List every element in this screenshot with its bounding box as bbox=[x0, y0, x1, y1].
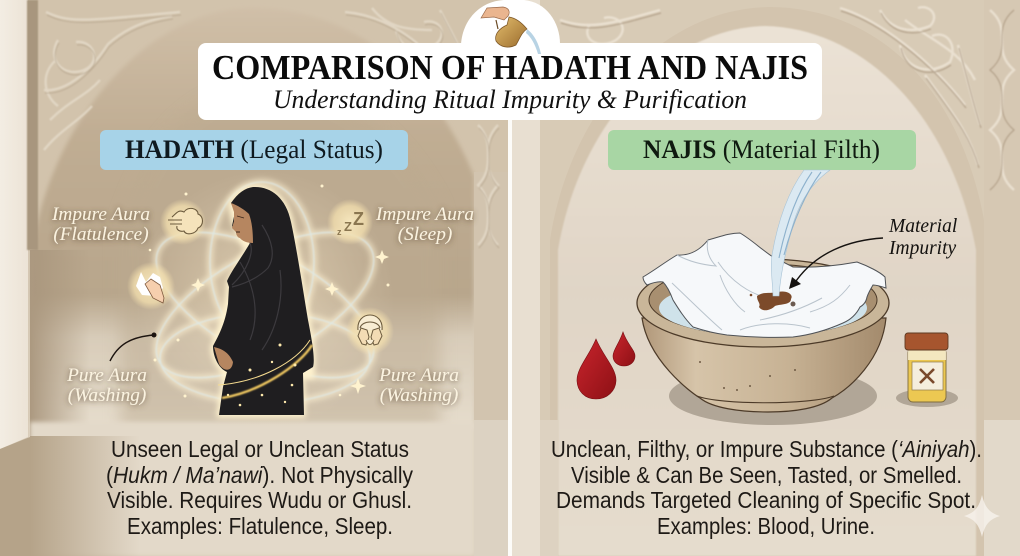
stain bbox=[757, 291, 792, 310]
text block: Najis description bbox=[551, 436, 982, 539]
icon: washing face bbox=[346, 307, 394, 355]
arch ornament: left bbox=[44, 8, 498, 245]
badge: white semicircle behind jug bbox=[461, 0, 560, 44]
label: impure aura flatulence bbox=[51, 204, 150, 245]
text block: Hadath description: Unseen Legal or Unclean Status bbox=[111, 436, 409, 462]
arch ornament: right bbox=[560, 7, 1014, 190]
text block: Hadath description: Visible. Requires Wudu or Ghusl. bbox=[107, 487, 412, 513]
bowl specks bbox=[699, 361, 796, 391]
label: pure aura washing right: (Washing) bbox=[380, 385, 458, 406]
divider bbox=[508, 0, 512, 556]
label: impure aura sleep bbox=[375, 204, 474, 245]
icon: sleep zzz: Z bbox=[344, 219, 352, 234]
label: impure aura sleep: (Sleep) bbox=[398, 224, 452, 245]
label: pure aura washing right: Pure Aura bbox=[378, 365, 459, 386]
icon: sleep zzz: Z bbox=[353, 209, 364, 229]
icon: pouring jug bbox=[481, 7, 541, 54]
sparkles bbox=[149, 184, 390, 398]
arrow bbox=[794, 238, 883, 284]
text block: Hadath description: Examples: Flatulence, Sleep. bbox=[127, 513, 393, 539]
bowl shadow bbox=[669, 367, 877, 425]
subtitle: Understanding Ritual Impurity & Purification bbox=[273, 85, 747, 114]
heading: Hadath: HADATH (Legal Status) bbox=[125, 135, 383, 164]
figure bbox=[212, 186, 314, 416]
title panel bbox=[198, 43, 822, 120]
heading: Najis bbox=[608, 130, 916, 170]
sparkle band bbox=[222, 345, 312, 398]
heading: Hadath bbox=[100, 130, 408, 170]
bowl body bbox=[642, 318, 886, 412]
label: pure aura washing left: (Washing) bbox=[68, 385, 146, 406]
panel: left arch background bbox=[0, 0, 510, 556]
face bbox=[231, 203, 253, 243]
illustration: woman with aura rings bbox=[135, 170, 395, 430]
label: pure aura washing left bbox=[66, 332, 156, 406]
label: material impurity bbox=[789, 216, 957, 289]
water stream bbox=[771, 170, 830, 296]
text block: Hadath description bbox=[106, 436, 413, 539]
icon: corner sparkle bbox=[964, 495, 1000, 537]
illustration: bowl with stained cloth bbox=[637, 170, 889, 425]
icon: flatulence cloud bbox=[160, 199, 206, 245]
label: pure aura washing left: Pure Aura bbox=[66, 365, 147, 386]
title: COMPARISON OF HADATH AND NAJIS bbox=[212, 48, 808, 87]
icon: sleep zzz: z bbox=[337, 227, 342, 237]
text block: Najis description: Visible & Can Be Seen, Tasted, or Smelled. bbox=[571, 462, 962, 488]
label: impure aura flatulence: Impure Aura bbox=[51, 204, 150, 225]
icon: blood drops bbox=[577, 332, 635, 399]
text block: Najis description: Demands Targeted Cleaning of Specific Spot. bbox=[556, 487, 976, 513]
bowl rim bbox=[637, 259, 889, 347]
icon: sleep zzz bbox=[327, 199, 373, 245]
text block: Hadath description: (Hukm / Ma’nawi). Not Physically bbox=[106, 462, 413, 488]
text block: Najis description: Examples: Blood, Urine. bbox=[657, 513, 875, 539]
label: material impurity: Impurity bbox=[888, 238, 956, 259]
cloth bbox=[643, 233, 886, 337]
label: impure aura sleep: Impure Aura bbox=[375, 204, 474, 225]
label: impure aura flatulence: (Flatulence) bbox=[53, 224, 149, 245]
icon: washing hands bbox=[127, 262, 175, 310]
text block: Najis description: Unclean, Filthy, or Impure Substance (‘Ainiyah). bbox=[551, 436, 982, 462]
label: material impurity: Material bbox=[888, 216, 957, 237]
panel: right arch background bbox=[512, 0, 1020, 556]
label: pure aura washing right bbox=[378, 365, 459, 406]
icon: urine jar bbox=[896, 333, 958, 407]
aura rings bbox=[135, 182, 395, 407]
heading: Najis: NAJIS (Material Filth) bbox=[643, 135, 880, 164]
